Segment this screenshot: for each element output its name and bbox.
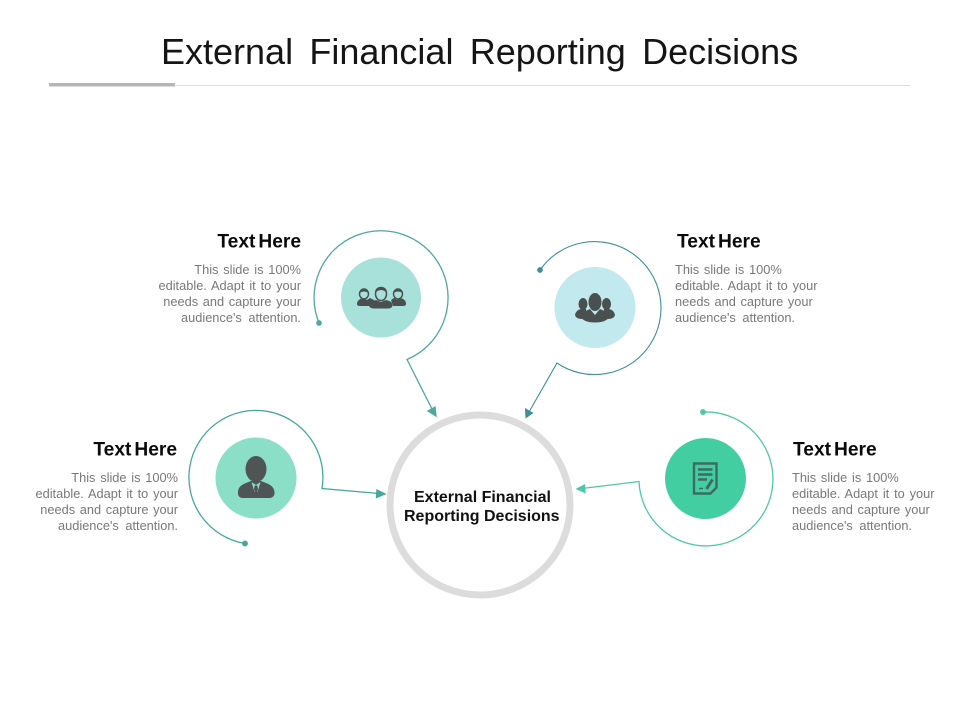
body text <box>158 262 302 325</box>
body text: editable. Adapt it to your <box>792 486 935 501</box>
body text: needs and capture your <box>792 502 930 517</box>
title: External Financial Reporting Decisions <box>161 31 798 72</box>
body text: audience's attention. <box>792 518 912 533</box>
panel: bottom-left item <box>35 410 385 546</box>
arrow: curved path to centre <box>189 410 385 546</box>
central label: Reporting Decisions <box>404 508 560 525</box>
central label <box>404 489 560 525</box>
body text: needs and capture your <box>675 294 813 309</box>
icon: document with pen <box>665 438 746 519</box>
body text: editable. Adapt it to your <box>675 278 818 293</box>
icon: businessman <box>216 438 296 518</box>
body text <box>35 470 179 533</box>
body text: needs and capture your <box>40 502 179 517</box>
body text: needs and capture your <box>163 294 302 309</box>
body text <box>792 470 935 533</box>
icon: team of three <box>341 258 421 338</box>
body text: This slide is 100% <box>792 470 899 485</box>
central ring <box>390 415 570 595</box>
heading: Text Here <box>93 440 177 460</box>
body text: audience's attention. <box>675 310 795 325</box>
panel: bottom-right item <box>577 410 935 546</box>
heading: Text Here <box>217 232 301 252</box>
header rule <box>49 83 910 86</box>
body text <box>675 262 818 325</box>
panel: top-left item <box>158 231 448 416</box>
arrow: curved path to centre <box>577 410 773 546</box>
heading: Text Here <box>793 440 877 460</box>
icon: business team <box>554 267 636 348</box>
panel: top-right item <box>526 232 818 418</box>
central label: External Financial <box>414 489 551 506</box>
arrow: curved path to centre <box>314 231 448 416</box>
body text: This slide is 100% <box>675 262 782 277</box>
body text: editable. Adapt it to your <box>158 278 302 293</box>
body text: editable. Adapt it to your <box>35 486 179 501</box>
body text: audience's attention. <box>181 310 301 325</box>
body text: This slide is 100% <box>194 262 301 277</box>
arrow: curved path to centre <box>526 242 661 418</box>
heading: Text Here <box>677 232 761 252</box>
body text: This slide is 100% <box>71 470 178 485</box>
body text: audience's attention. <box>58 518 178 533</box>
